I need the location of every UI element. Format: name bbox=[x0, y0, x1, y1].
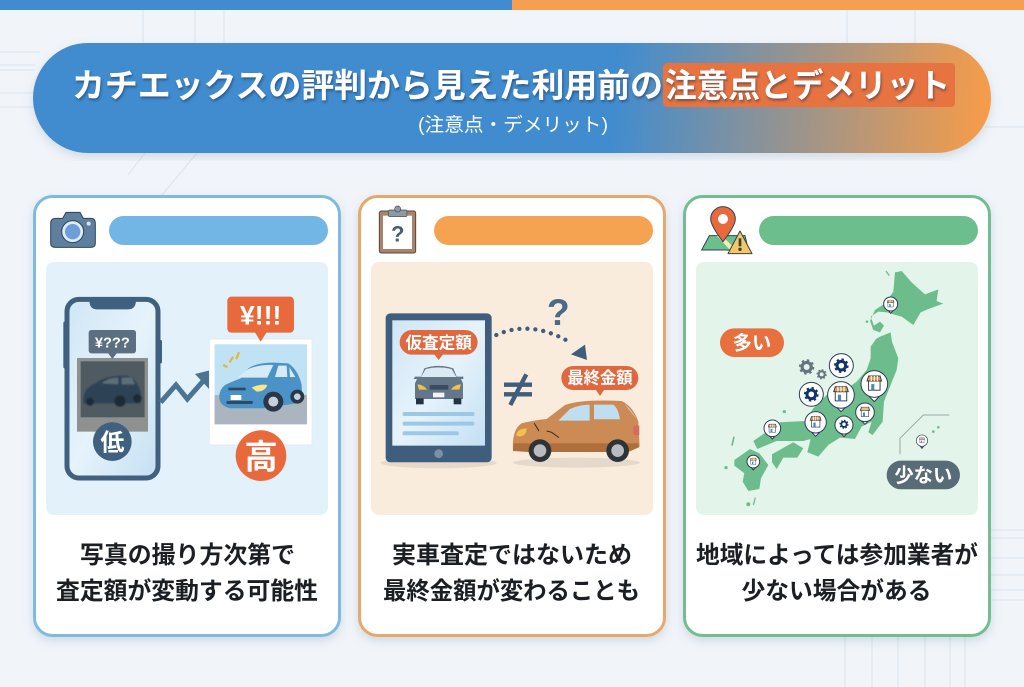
question mark: ? bbox=[547, 291, 570, 333]
map of Japan bbox=[724, 271, 949, 506]
label: many: 多い bbox=[733, 333, 771, 355]
caption: 最終金額が変わることも bbox=[383, 577, 640, 605]
caption: 査定額が変動する可能性 bbox=[56, 577, 318, 605]
caption bbox=[383, 542, 640, 605]
header pill bbox=[759, 216, 978, 245]
illustration panel bbox=[46, 262, 328, 515]
price label: ¥??? bbox=[95, 335, 130, 351]
price label: ¥!!! bbox=[240, 300, 281, 330]
illustration: damaged car with final price bbox=[513, 366, 640, 468]
arrow: dotted bbox=[496, 291, 587, 360]
icon: map pin and warning bbox=[702, 207, 752, 254]
top colour bar bbox=[0, 0, 1024, 10]
panel: region bbox=[684, 196, 990, 636]
panel: estimate bbox=[360, 196, 664, 636]
caption: 実車査定ではないため bbox=[392, 542, 632, 569]
caption bbox=[696, 541, 978, 605]
caption bbox=[56, 542, 318, 605]
title: 注意点とデメリット bbox=[665, 67, 950, 104]
title bbox=[72, 67, 950, 104]
caption: 写真の撮り方次第で bbox=[80, 542, 295, 569]
label: few bbox=[887, 461, 960, 489]
pins bbox=[747, 297, 928, 470]
illustration panel bbox=[371, 262, 653, 515]
illustration: tablet with provisional price bbox=[381, 313, 497, 468]
illustration panel bbox=[696, 262, 978, 515]
icon: camera bbox=[51, 212, 95, 247]
header pill bbox=[109, 216, 328, 245]
not equal sign bbox=[504, 374, 532, 405]
caption: 地域によっては参加業者が bbox=[696, 541, 978, 569]
caption: 少ない場合がある bbox=[742, 577, 932, 605]
header pill bbox=[434, 216, 653, 245]
title: カチエックスの評判から見えた利用前の bbox=[72, 67, 663, 104]
icon: clipboard bbox=[379, 206, 416, 253]
icon: clipboard: ? bbox=[391, 222, 404, 247]
panel: photo bbox=[34, 196, 340, 636]
provisional label: 仮査定額 bbox=[405, 333, 472, 352]
label: many bbox=[720, 328, 784, 357]
label: few: 少ない bbox=[894, 465, 952, 487]
arrow: rising bbox=[161, 369, 215, 402]
final price label: 最終金額 bbox=[567, 369, 633, 388]
illustration: phone with low price bbox=[63, 299, 162, 478]
subtitle: (注意点・デメリット) bbox=[418, 114, 608, 136]
illustration: good photo with high price bbox=[209, 297, 312, 481]
title banner bbox=[33, 43, 991, 153]
high label: 高 bbox=[244, 439, 278, 476]
low label: 低 bbox=[100, 430, 124, 457]
